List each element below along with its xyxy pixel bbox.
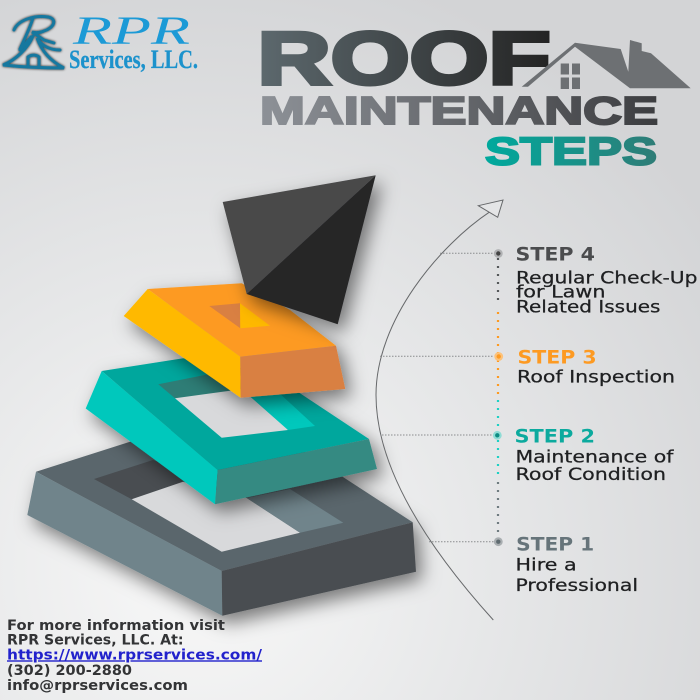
- step 1 description: Hire a: [516, 556, 577, 575]
- step 3 description: Roof Inspection: [517, 368, 675, 387]
- step 4 description: [516, 268, 698, 316]
- contact information: For more information visit: [7, 618, 225, 634]
- title word ROOF: ROOF: [258, 17, 550, 100]
- step 3 text: [517, 346, 675, 387]
- step 2 description: Maintenance of: [516, 448, 675, 467]
- dark pyramid: [223, 175, 376, 324]
- step 4 heading: STEP 4: [516, 244, 595, 266]
- title: [258, 17, 691, 174]
- grey base layer: [27, 410, 416, 616]
- logo name RPR: RPR: [71, 8, 190, 53]
- logo name Services: Services, LLC.: [69, 45, 198, 74]
- icon: step 4 dot: [494, 249, 503, 258]
- step 2 description: [516, 448, 675, 484]
- icon: step 3 dot: [494, 352, 503, 361]
- step 2 description: Roof Condition: [516, 465, 666, 484]
- icon: step 2 dot: [493, 431, 502, 440]
- step 1 text: [516, 534, 638, 595]
- step 2 text: [514, 425, 675, 484]
- step 3 heading: STEP 3: [518, 346, 597, 368]
- step 2 heading: STEP 2: [514, 425, 595, 447]
- contact information: RPR Services, LLC. At:: [7, 632, 183, 648]
- contact information: [7, 618, 263, 694]
- orange layer: [124, 283, 345, 398]
- step 4 description: Regular Check-Up: [516, 268, 698, 287]
- icon: logo house with R: [3, 17, 64, 68]
- timeline: [380, 249, 503, 546]
- logo: [3, 8, 198, 74]
- contact information: https://www.rprservices.com/: [7, 647, 263, 663]
- curved arrow: [376, 200, 503, 620]
- icon: house roof: [522, 40, 691, 89]
- contact information: info@rprservices.com: [7, 678, 188, 694]
- step 4 description: Related Issues: [516, 297, 660, 316]
- teal layer: [86, 358, 377, 504]
- step 1 description: Professional: [516, 576, 638, 595]
- step 4 text: [516, 244, 698, 316]
- title word MAINTENANCE: MAINTENANCE: [260, 90, 658, 133]
- step 4 description: for Lawn: [516, 282, 606, 301]
- icon: step 1 dot: [494, 537, 503, 546]
- contact information: (302) 200-2880: [7, 663, 132, 679]
- title word STEPS: STEPS: [485, 130, 657, 174]
- step 1 description: [516, 556, 638, 595]
- step 1 heading: STEP 1: [516, 534, 594, 556]
